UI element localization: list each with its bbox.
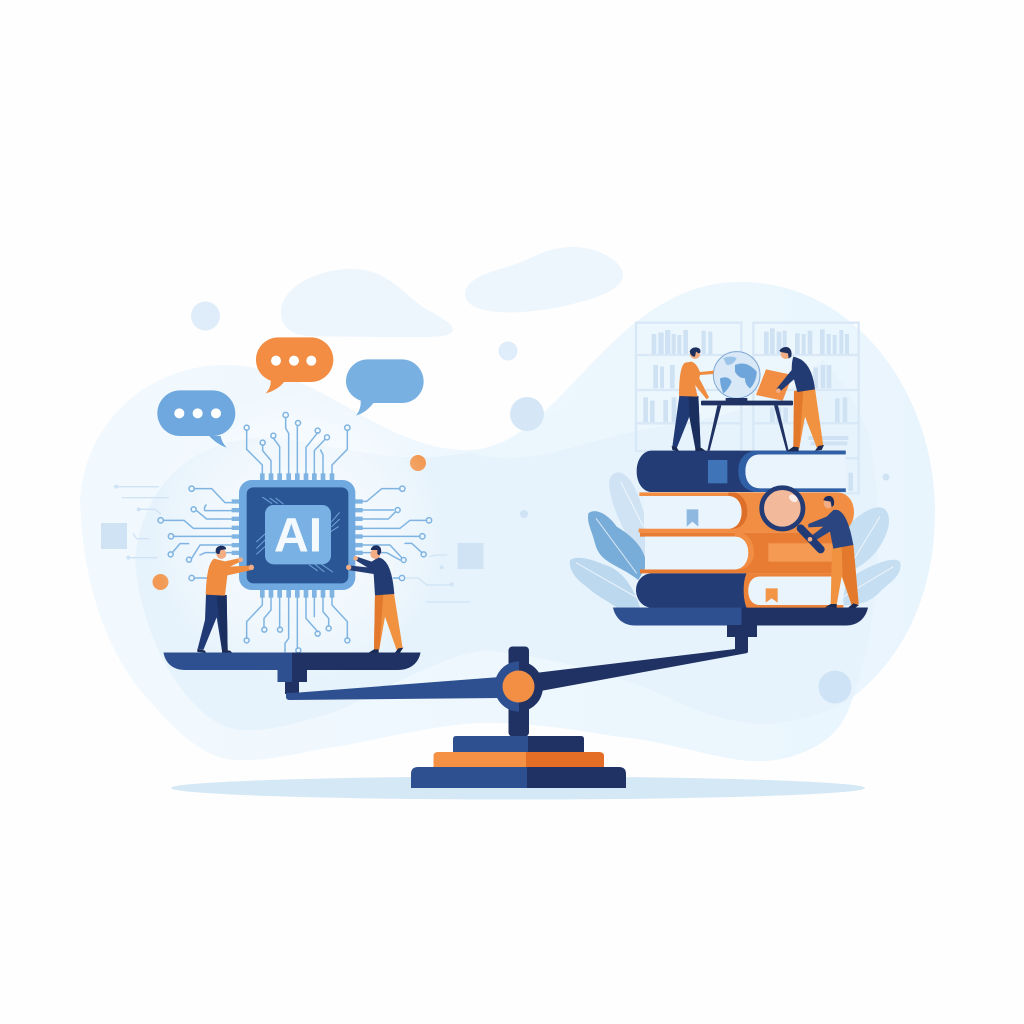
speech bubble: blue with dots bbox=[157, 390, 235, 448]
right scale pan bbox=[613, 608, 868, 652]
person: left, orange shirt bbox=[197, 546, 254, 653]
left scale pan bbox=[164, 652, 420, 694]
scale base tiers bbox=[411, 736, 626, 788]
speech bubble: empty blue bbox=[346, 359, 424, 416]
chip body bbox=[239, 480, 355, 590]
chip halo bbox=[153, 390, 443, 680]
cloud shape right bbox=[465, 247, 623, 312]
circuit traces bbox=[158, 412, 432, 653]
ground shadow bbox=[171, 776, 865, 800]
person: navy shirt at globe bbox=[776, 347, 824, 451]
globe on table bbox=[713, 352, 760, 401]
magnifying glass bbox=[762, 488, 821, 549]
AI chip side bbox=[114, 337, 470, 653]
speech bubble: orange with dots bbox=[256, 337, 333, 393]
book 2: orange bbox=[639, 492, 854, 533]
scale beam bbox=[286, 649, 748, 700]
knowledge side bbox=[570, 323, 901, 608]
book 1: navy, top bbox=[637, 451, 846, 492]
table bbox=[701, 401, 793, 451]
orange book held bbox=[756, 369, 793, 401]
bookshelves bbox=[636, 323, 859, 493]
AI label: AI bbox=[274, 509, 322, 563]
faded circuit lines bbox=[114, 485, 470, 602]
leaves right bbox=[842, 507, 901, 605]
chip pins bbox=[232, 473, 363, 598]
person: orange shirt at globe bbox=[672, 347, 714, 452]
person: navy shirt with magnifier bbox=[808, 496, 859, 608]
book 4: navy bottom bbox=[636, 573, 843, 608]
leaves left bbox=[570, 472, 647, 607]
person: right, navy shirt bbox=[346, 545, 403, 653]
background: soft blue blobs bbox=[80, 282, 935, 761]
decorative circles and squares bbox=[101, 302, 890, 704]
scale post and pivot bbox=[494, 646, 543, 736]
book 3: orange bbox=[640, 533, 833, 573]
cloud shape left bbox=[281, 269, 453, 337]
